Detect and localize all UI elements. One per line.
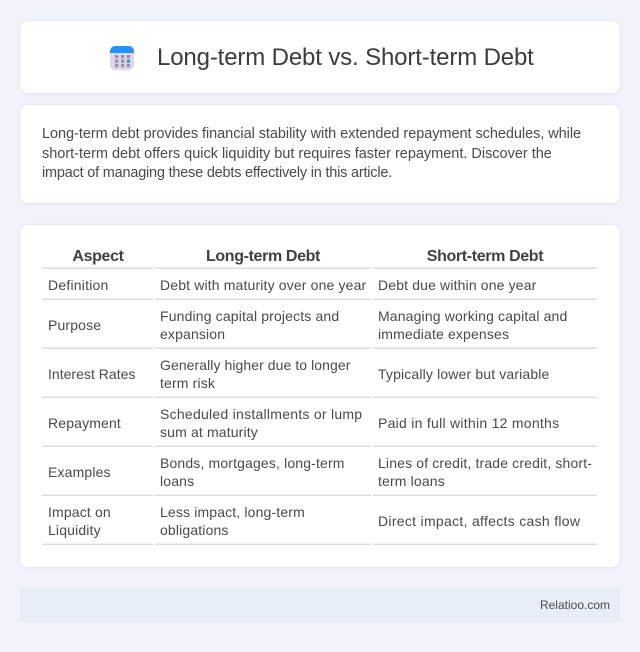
row: examples: Bonds, mortgages, long-term bbox=[160, 455, 345, 471]
intro text: impact of managing these debts effectively in this article. bbox=[42, 165, 392, 181]
intro text: Long-term debt provides financial stability with extended repayment schedules, while bbox=[42, 126, 581, 142]
row: impact on liquidity: obligations bbox=[160, 522, 229, 538]
footer credit: Relatioo.com bbox=[540, 598, 610, 612]
row: impact on liquidity bbox=[48, 504, 580, 538]
row: impact on liquidity: Direct impact, affects cash flow bbox=[378, 513, 580, 529]
table header bbox=[72, 248, 544, 265]
row: examples: Lines of credit, trade credit, short- bbox=[378, 455, 592, 471]
row: purpose: immediate expenses bbox=[378, 326, 509, 342]
row: impact on liquidity: Liquidity bbox=[48, 522, 101, 538]
row: purpose: Funding capital projects and bbox=[160, 308, 339, 324]
row: purpose: Managing working capital and bbox=[378, 308, 567, 324]
row: purpose bbox=[48, 308, 567, 342]
row: interest rates bbox=[48, 357, 550, 391]
row: repayment: Paid in full within 12 months bbox=[378, 415, 559, 431]
intro text bbox=[42, 126, 581, 181]
footer bbox=[20, 588, 620, 622]
row: repayment: sum at maturity bbox=[160, 424, 258, 440]
panel: title card bbox=[20, 21, 620, 93]
row: repayment: Scheduled installments or lump bbox=[160, 406, 362, 422]
row: interest rates: Typically lower but variable bbox=[378, 366, 550, 382]
row: interest rates: Generally higher due to longer bbox=[160, 357, 350, 373]
row: repayment bbox=[48, 406, 559, 440]
row: examples: loans bbox=[160, 473, 194, 489]
intro text: short-term debt offers quick liquidity but requires faster repayment. Discover the bbox=[42, 146, 552, 162]
row: definition bbox=[48, 277, 536, 293]
row: interest rates: Interest Rates bbox=[48, 366, 135, 382]
row: impact on liquidity: Impact on bbox=[48, 504, 111, 520]
row: purpose: Purpose bbox=[48, 317, 101, 333]
row: examples bbox=[48, 455, 592, 489]
table header: Short-term Debt bbox=[427, 248, 543, 265]
row: repayment: Repayment bbox=[48, 415, 121, 431]
row: impact on liquidity: Less impact, long-term bbox=[160, 504, 305, 520]
row: definition: Debt due within one year bbox=[378, 277, 536, 293]
icon: calendar bbox=[110, 46, 134, 70]
table header: Aspect bbox=[72, 248, 124, 265]
row: definition: Debt with maturity over one year bbox=[160, 277, 366, 293]
title: Long-term Debt vs. Short-term Debt bbox=[157, 44, 534, 71]
row: examples: term loans bbox=[378, 473, 445, 489]
row: definition: Definition bbox=[48, 277, 109, 293]
row: interest rates: term risk bbox=[160, 375, 215, 391]
row: examples: Examples bbox=[48, 464, 111, 480]
panel: comparison table bbox=[20, 225, 620, 567]
row: purpose: expansion bbox=[160, 326, 225, 342]
table header: Long-term Debt bbox=[206, 248, 320, 265]
panel: introduction bbox=[20, 105, 620, 203]
